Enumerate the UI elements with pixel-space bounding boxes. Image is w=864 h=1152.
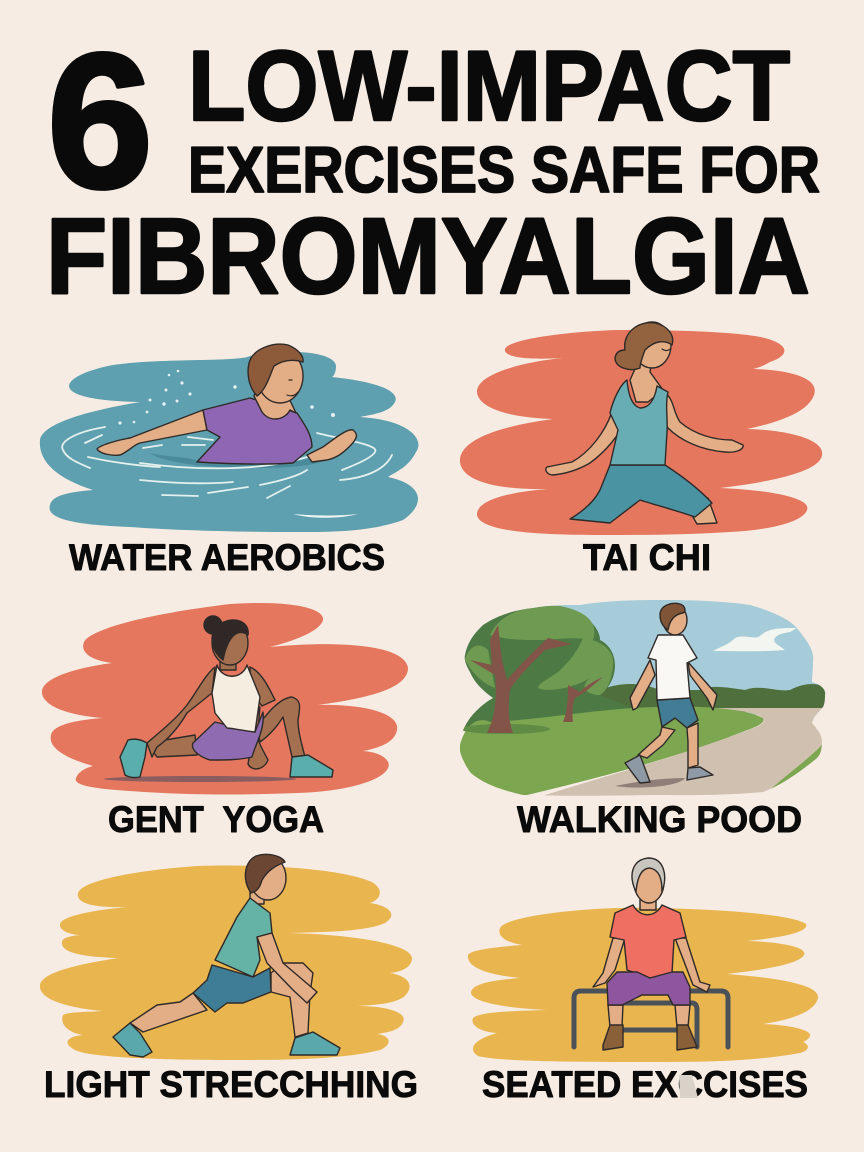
grass: [460, 707, 764, 796]
seated figure: [593, 858, 710, 1050]
corner grass: [772, 745, 822, 788]
yellow blob: [468, 908, 818, 1062]
water ripples: [62, 427, 392, 498]
panel: seated exercises: [468, 858, 818, 1062]
white water streak: [293, 514, 358, 518]
tree shadow: [460, 724, 550, 734]
sky: [460, 595, 830, 715]
panel: tai chi: [460, 322, 822, 535]
label: gent yoga: GENT YOGA: [108, 799, 324, 840]
coral blob: [42, 603, 408, 794]
floor shadow: [104, 776, 296, 782]
tree mass: [460, 608, 640, 730]
cloud: [713, 628, 797, 651]
dark swirl below swimmer: [150, 453, 324, 468]
coral blob: [460, 330, 822, 535]
panel: water aerobics: [40, 344, 418, 532]
swimmer: [97, 344, 356, 464]
title: [46, 13, 820, 316]
yoga figure: [120, 616, 333, 778]
shoe left: [120, 739, 147, 778]
title: FIBROMYALGIA: [46, 195, 810, 316]
title: 6: [47, 13, 153, 228]
title: LOW-IMPACT: [188, 30, 790, 141]
label: light streching: LIGHT STRECCHHING: [44, 1064, 418, 1105]
shadow: [615, 778, 685, 788]
walking person: [615, 603, 717, 788]
label: seated excises: SEATED EXCCISES: [482, 1064, 808, 1105]
yellow blob: [40, 866, 412, 1060]
big tree: [470, 625, 572, 733]
label: water aerobics: WATER AEROBICS: [69, 537, 385, 578]
shoe back: [113, 1023, 152, 1057]
path: [544, 708, 822, 796]
text smudge: [679, 1075, 698, 1098]
bench: [574, 991, 728, 1047]
panel: walking scene: [460, 595, 830, 800]
label: tai chi: TAI CHI: [583, 537, 711, 578]
shoes: [603, 1025, 623, 1050]
far hedge: [600, 684, 830, 712]
shoe right: [290, 755, 333, 777]
panel: gentle yoga: [42, 603, 408, 794]
shoe front: [290, 1032, 340, 1055]
panel: light stretching: [40, 854, 412, 1060]
splash dots: [118, 370, 335, 425]
shoes: [625, 755, 650, 783]
label: walking pood: WALKING POOD: [517, 799, 802, 840]
lunge figure: [113, 854, 340, 1057]
teal water blob: [40, 352, 418, 532]
small tree: [563, 677, 603, 722]
tai chi figure: [546, 322, 743, 524]
light canopy: [490, 606, 594, 640]
